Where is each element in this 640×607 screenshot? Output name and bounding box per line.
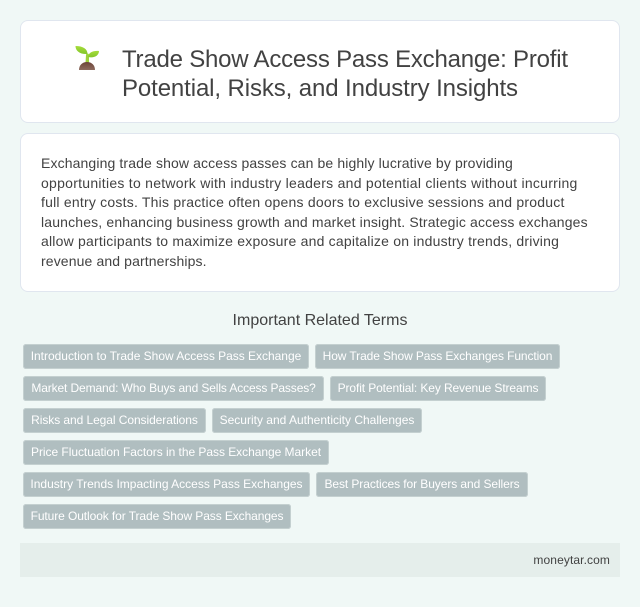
tag: Industry Trends Impacting Access Pass Exchanges xyxy=(30,477,303,491)
summary text: allow participants to maximize exposure and capitalize on industry trends, driving xyxy=(41,233,559,249)
panel: related terms tags xyxy=(23,344,560,529)
summary text: revenue and partnerships. xyxy=(41,252,207,268)
title: Potential, Risks, and Industry Insights xyxy=(122,74,518,102)
tag xyxy=(23,472,310,497)
tag: Profit Potential: Key Revenue Streams xyxy=(338,381,538,395)
summary text: Exchanging trade show access passes can be highly lucrative by providing xyxy=(41,155,513,171)
tag xyxy=(315,344,560,369)
summary text: launches, enhancing business growth and market insight. Strategic access exchanges xyxy=(41,214,588,230)
title: Trade Show Access Pass Exchange: Profit xyxy=(122,46,568,72)
tag: Market Demand: Who Buys and Sells Access Passes? xyxy=(31,381,316,395)
panel: summary card xyxy=(20,133,620,292)
title xyxy=(122,46,568,102)
tag: Price Fluctuation Factors in the Pass Exchange Market xyxy=(31,445,321,459)
tag xyxy=(212,408,422,433)
tag: How Trade Show Pass Exchanges Function xyxy=(323,349,552,363)
summary text xyxy=(41,155,588,269)
icon: sprout xyxy=(76,46,99,70)
tag xyxy=(330,376,546,401)
tag xyxy=(316,472,528,497)
tag xyxy=(23,440,329,465)
tag: Introduction to Trade Show Access Pass Exchange xyxy=(31,349,301,363)
footer source text: moneytar.com xyxy=(533,553,610,567)
tag: Best Practices for Buyers and Sellers xyxy=(324,477,520,491)
summary text: opportunities to network with industry leaders and potential clients without incurring xyxy=(41,174,578,190)
heading: related terms: Important Related Terms xyxy=(233,312,407,329)
footer bar xyxy=(20,543,620,577)
tag xyxy=(23,408,206,433)
tag xyxy=(23,344,309,369)
tag xyxy=(23,504,291,529)
panel: header card xyxy=(20,20,620,123)
tag: Future Outlook for Trade Show Pass Exchanges xyxy=(31,509,283,523)
summary text: full entry costs. This practice often opens doors to exclusive sessions and product xyxy=(41,194,565,210)
tag: Risks and Legal Considerations xyxy=(31,413,198,427)
tag: Security and Authenticity Challenges xyxy=(220,413,414,427)
tag xyxy=(23,376,324,401)
